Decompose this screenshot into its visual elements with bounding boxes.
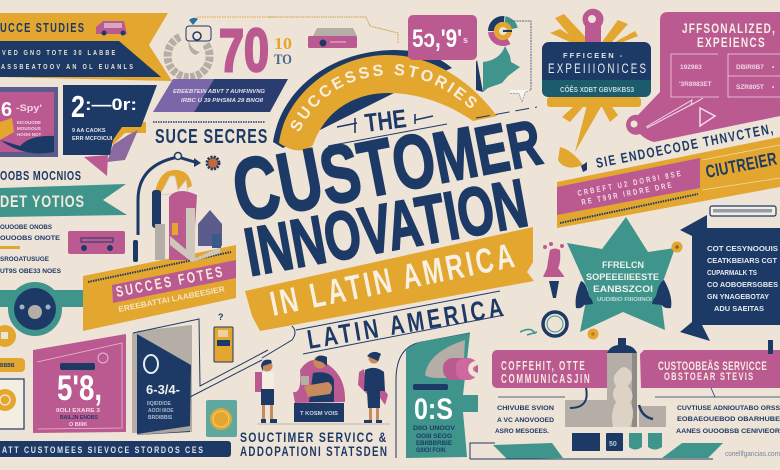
icon: pink stamp and navy cone (543, 242, 564, 298)
panel: communication pink box: COMMUNICASJIN (501, 372, 590, 387)
panel: efficient experiences badge: CÔÊS XDBT GBVBKBS3 (560, 85, 634, 94)
panel: teal star: EANBSZCOI (593, 284, 653, 294)
icon: yellow pill and card (0, 358, 25, 429)
panel: teal 0:s stat: GIIIOI FOIK (416, 448, 447, 454)
panel: pink stat card: HOOH NOT (17, 132, 42, 137)
panel: navy speech bubble: CO AOBOERSGBES (707, 282, 778, 289)
icon: small pointer mark (581, 162, 587, 172)
panel: teal ribbon (0, 184, 127, 217)
heading: slanted navy text: SIE ENDOECODE THNVCTEN, (595, 121, 774, 171)
ribbon text: ASSBEATOOV AN OL EUANLS (1, 63, 133, 71)
heading: customer service and adoption stats: ADDOPATIONI STATSDEN (240, 443, 387, 459)
icon: right edge pin (768, 340, 773, 354)
text block: communication notes: ASRO MESOEES. (495, 428, 549, 435)
icons: small chips row (572, 433, 662, 451)
panel: pink 58 stat card: IIOLI EXARE 3 (56, 408, 100, 414)
panel: teal 0:s stat: EBIIBBRBIE (416, 441, 452, 447)
panel: slanted yellow and pink ribbon: RE T99R IRDRE DRE (581, 182, 672, 207)
panel: purple and navy caption banner (153, 79, 288, 112)
panel: navy stat callout: ERR MCFOICUI (72, 136, 113, 142)
panel: personalized experiences: SZR805T (736, 84, 764, 91)
panel: personalized experiences: DBIR0B7 (736, 64, 764, 71)
panel: pink stat card: 6 (1, 99, 12, 121)
label: ciutreier: CIUTREIER (704, 150, 779, 183)
text block: service notes: EOBAEOUEBOD OBARHUBE (677, 416, 780, 423)
ribbon text (1, 49, 133, 71)
panel: personalized experiences: • (772, 84, 775, 91)
panel: navy speech bubble (680, 206, 780, 341)
text block: communication notes: A VC ANOVOOED (497, 417, 554, 424)
panel: bottom navy bar: ATT CUSTOMEES SIEVOCE STORDOS CES (2, 444, 203, 455)
title arc: success stories: SUCCESSS STORIES (290, 64, 477, 132)
panel: navy stat callout: 9 AA CAOKS (72, 128, 106, 134)
panel: success studies ribbon (0, 13, 172, 81)
icon: ring (520, 312, 567, 336)
panel: pink 58 stat card: 5'8, (57, 369, 102, 408)
panel: pink stat card: -Spy' (16, 103, 42, 113)
banner: in latin america: IN LATIN AMRICA (267, 237, 517, 324)
text block: service notes: CUVTIUSE ADNIOUTABO ORSS (677, 405, 780, 412)
text block: left notes: OUOOBS ONOTE (0, 236, 60, 242)
panel: customer service pink box: CUSTOOBEÄS SERVICCE (658, 358, 767, 374)
icon: yellow pill and card: BBBB (0, 363, 15, 369)
chart: donut (487, 15, 519, 47)
heading: success secrets: SUCE SECRES (155, 125, 267, 148)
panel: personalized experiences: 192983 (680, 64, 702, 71)
icon: gadget (214, 312, 233, 362)
panel: teal 0:s stat: 0:S (414, 393, 453, 426)
panel: slanted yellow and pink ribbon: CRBEFT U2 DOR9I 8SE (577, 170, 682, 198)
panel: personalized experiences (626, 12, 780, 142)
text block: communication notes (495, 397, 565, 435)
panel: navy speech bubble: CEATKBEIARS CGT (707, 258, 778, 265)
panel: teal star (567, 217, 682, 340)
panel: personalized experiences: '3R8983ET (679, 81, 712, 88)
panel: teal 0:s stat: OOIII SEOG (416, 434, 452, 440)
panel: purple and navy caption banner: EBEEBTEIN ABVT 7 AUHFINVNG (173, 89, 266, 95)
panel: pink 58 stat card: O BIIIK (69, 422, 87, 428)
icon: grey gear with loop (168, 17, 280, 77)
heading: latin america: LATIN AMERICA (305, 293, 505, 356)
illustration: machine with arc and gear (133, 152, 222, 262)
panel: success notes band (83, 245, 236, 331)
panel: communication pink box: COFFEHIT, OTTE (501, 359, 585, 374)
panel: pink 58 stat card (33, 334, 126, 433)
panel: navy speech bubble: CUPARMALK TS (707, 270, 757, 277)
person center with podium: T KOSM VOIS (300, 411, 338, 417)
panel: pink 5 3/9 stat: 5ɔ,'9' (412, 25, 462, 53)
panel: purple and navy caption banner: IRBC U 39 PIHSMA 29 BNOII (181, 98, 264, 104)
panel: navy door stat: IIQIDDIOE (147, 401, 172, 407)
panel: success notes band: EREEBATTAI LAABEESIER (118, 284, 226, 314)
icon: van (87, 21, 133, 36)
panel: navy door stat (132, 319, 268, 435)
panel: pink 5 3/9 stat: s (463, 35, 468, 45)
panel: navy speech bubble: ADU SAEITAS (714, 306, 764, 313)
text block: left notes: SROOATUSUGE (0, 256, 50, 263)
panel: customer service pink box: OBSTOEAR STEVIS (664, 369, 753, 382)
title: the (328, 104, 537, 146)
icons: small chips row: 50 (609, 441, 617, 448)
panel: navy speech bubble: COT CESYNOOUIS (707, 246, 778, 253)
title: innovation: INNOVATION (239, 165, 533, 291)
text: boobs mocnios: OOBS MOCNIOS (0, 170, 81, 183)
panel: personalized experiences: EXPEIENCS (697, 34, 765, 50)
icon: teal map with navy edge (476, 46, 520, 92)
panel: teal 0:s stat (396, 333, 478, 458)
heading: customer service and adoption stats: SOUCTIMER SERVICC & (240, 430, 386, 445)
panel: customer service pink box (640, 350, 780, 388)
panel: pink stat card (0, 87, 58, 157)
icon: pink machine box (68, 231, 125, 254)
text block: left notes (0, 225, 62, 275)
title: customer: CUSTOMER (225, 86, 548, 241)
icon: wheel with teal ribbon (0, 282, 103, 347)
footer teal shapes and website (470, 443, 780, 459)
panel: pink stat card: EICOUODE (17, 120, 41, 125)
panel: communication pink box (492, 350, 612, 388)
panel: teal star: SOPEEEIIEESTE (586, 272, 659, 282)
panel: pink 58 stat card: BAILJN ENOBS (60, 415, 98, 421)
text block: communication notes: CHIVUBE SVION (497, 405, 554, 412)
stat: 70 10 to: TO (274, 52, 292, 68)
icon: teal badge (206, 400, 237, 437)
panel: slanted yellow and pink ribbon (557, 137, 780, 228)
panel: navy door stat: AOOI IIIOE (148, 408, 174, 414)
panel: navy stat callout: :—0r: (85, 95, 137, 114)
person right (257, 352, 390, 424)
text block: left notes: UT9S OBE33 NOES (0, 268, 62, 275)
icon: gadget: ? (218, 312, 224, 322)
title arc: navy shadow (273, 50, 452, 148)
panel: navy door stat: BRDIBBIS (148, 415, 173, 421)
table (671, 54, 780, 97)
illustration: grey tower (565, 338, 666, 427)
text block: service notes (655, 388, 780, 435)
person left (255, 360, 277, 424)
panel: teal 0:s stat: DIIO UNOOV (413, 426, 455, 432)
icon: pink printer (268, 17, 398, 48)
icon: small outlined card (508, 21, 531, 101)
heading: customer service and adoption stats (240, 430, 387, 459)
panel: teal star: FFRELCN (602, 260, 644, 270)
panel: teal ribbon: DET YOTIOS (0, 192, 84, 212)
panel: efficient experiences badge: EXPEIIIONICES (548, 60, 646, 76)
panel: pink stat card: MOUGOUS (17, 126, 41, 131)
panel: personalized experiences: • (772, 64, 775, 71)
text block: service notes: AANES OUOOBSB CENIVIEOR (676, 428, 780, 435)
stat: 70 10 to: 10 (274, 34, 292, 53)
panel: efficient experiences badge (542, 9, 651, 168)
panel: navy speech bubble: GN YNAGEBOTAY (707, 294, 769, 301)
panel: pink 5 3/9 stat (408, 15, 477, 60)
panel: personalized experiences: JFFSONALIZED, (682, 20, 775, 36)
panel: teal star: UUDIBIO FIIIOIINOI (597, 297, 653, 303)
text block: left notes: OUOOBE ONOBS (0, 225, 52, 231)
ribbon text: VED GNO TOTE 30 LABBE (2, 49, 116, 57)
title arc: success stories (279, 55, 497, 150)
illustration: three people (255, 352, 390, 424)
icon: sunburst (547, 14, 641, 168)
heading: success notes: SUCCES FOTES (114, 263, 224, 300)
panel: navy stat callout: 2 (71, 89, 85, 124)
icon: pink cylinder (443, 358, 480, 380)
panel: bottom navy bar (0, 441, 231, 457)
title: the: THE (363, 104, 408, 137)
stat: 70 10 to: 70 (219, 17, 269, 84)
heading: success studies: UCCE STUDIES (0, 22, 84, 35)
panel: navy door stat: 6-3/4- (146, 382, 180, 397)
panel: navy stat callout (63, 85, 157, 176)
panel: efficient experiences badge: FFFICEEN - (563, 51, 624, 60)
